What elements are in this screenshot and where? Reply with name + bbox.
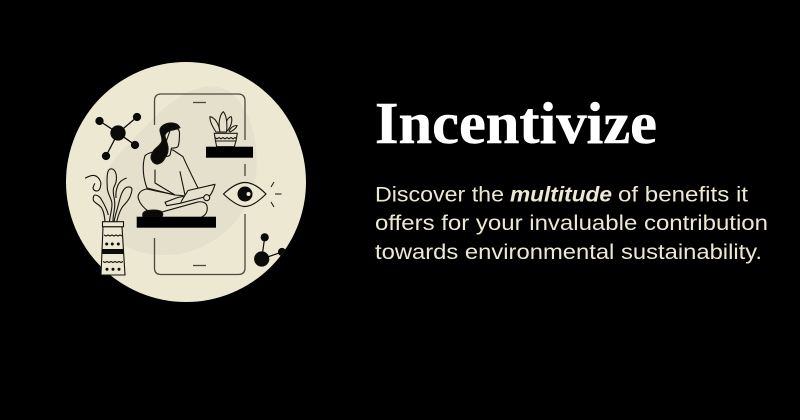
swirls xyxy=(85,175,101,191)
body text xyxy=(375,184,768,264)
line 1: multitude xyxy=(510,184,612,206)
vase dots xyxy=(105,242,120,271)
zigzags xyxy=(103,235,123,262)
hair xyxy=(151,123,180,164)
line 2: offers for your invaluable contribution xyxy=(375,212,768,235)
icon: eye xyxy=(224,182,282,207)
icon: potted plant xyxy=(210,112,237,147)
vase rim xyxy=(102,222,124,227)
torso and arms xyxy=(143,150,198,196)
soft background blob xyxy=(99,86,257,255)
vase body xyxy=(101,227,125,275)
face xyxy=(163,128,180,156)
hand xyxy=(165,196,183,206)
illustration: person meditating with phone xyxy=(66,62,306,302)
line 1: of benefits it xyxy=(618,184,748,206)
lower shelf xyxy=(137,217,216,228)
person seated cross-legged xyxy=(138,123,215,217)
upper shelf xyxy=(206,147,253,158)
foot xyxy=(143,210,163,217)
line 1 xyxy=(375,184,748,206)
vase band xyxy=(102,249,124,254)
vase with steam swirls xyxy=(85,169,132,275)
infographic canvas xyxy=(66,62,766,302)
line 3: towards environmental sustainability. xyxy=(375,241,762,264)
icon: network bottom right xyxy=(255,234,286,266)
crossed legs xyxy=(138,189,148,211)
icon: network top left xyxy=(96,114,140,160)
title: Incentivize xyxy=(375,90,657,156)
line 1: Discover the xyxy=(375,184,504,206)
phone outline xyxy=(154,94,245,274)
laptop xyxy=(180,184,215,203)
background circle xyxy=(66,62,306,302)
